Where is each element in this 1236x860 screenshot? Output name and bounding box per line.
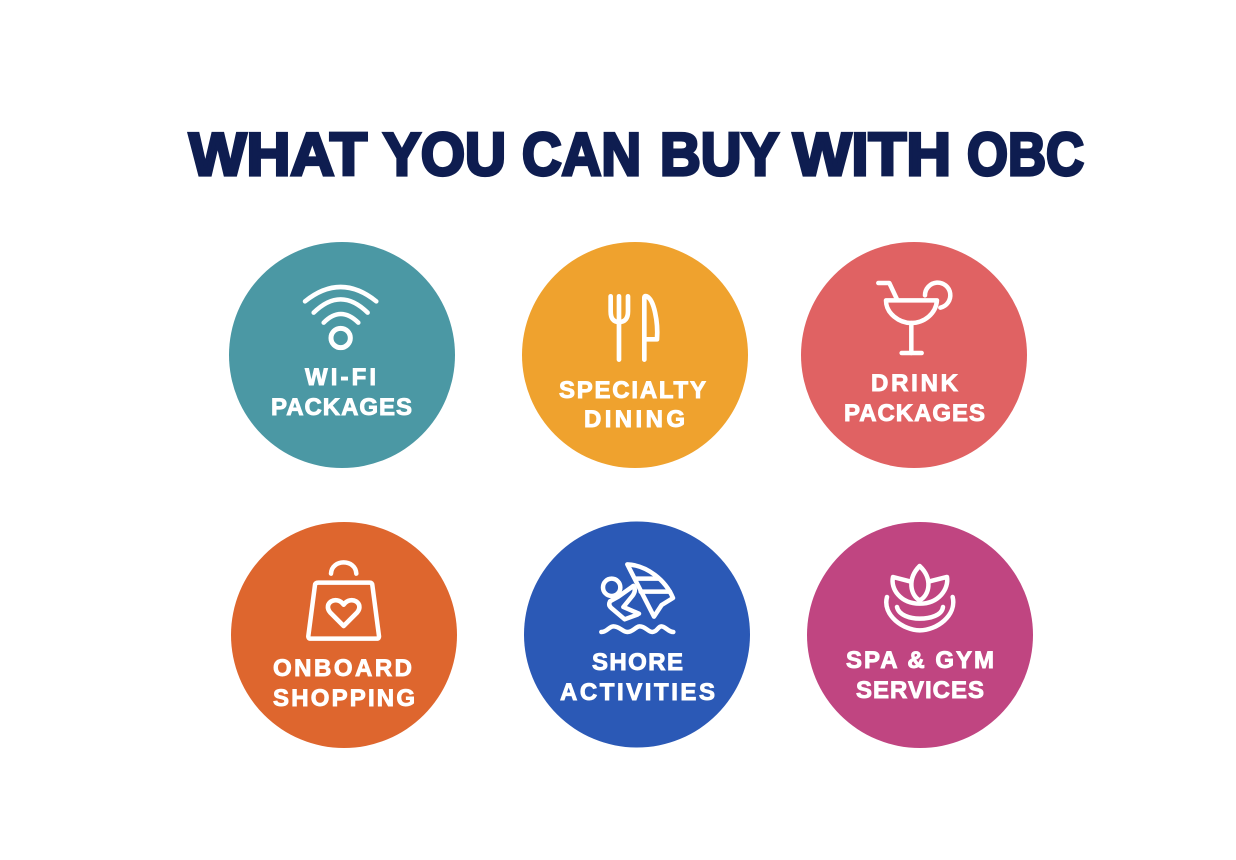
label: onboard shopping: ONBOARD [273, 655, 412, 682]
panel: specialty dining [522, 242, 748, 468]
label: drink packages [844, 370, 985, 427]
label: specialty dining: SPECIALTY [559, 377, 706, 404]
label: spa and gym services: SPA & GYM [846, 647, 994, 674]
label: spa and gym services: SERVICES [856, 677, 984, 704]
title [189, 121, 1084, 188]
label: spa and gym services [846, 647, 994, 704]
label: wi-fi packages: PACKAGES [271, 394, 412, 421]
label: shore activities: ACTIVITIES [560, 679, 715, 706]
panel: onboard shopping [231, 522, 457, 748]
panel: spa and gym services [807, 522, 1033, 748]
label: wi-fi packages [271, 364, 412, 421]
label: drink packages: DRINK [871, 370, 959, 397]
label: shore activities: SHORE [592, 649, 683, 676]
label: shore activities [560, 649, 715, 706]
label: onboard shopping [273, 655, 415, 712]
label: onboard shopping: SHOPPING [273, 685, 415, 712]
title: BUY [660, 121, 779, 188]
title: WHAT [189, 121, 367, 188]
title: OBC [967, 121, 1084, 188]
icon: kite surfer [601, 564, 673, 632]
title: CAN [522, 121, 641, 188]
icon: wi-fi [305, 287, 376, 348]
panel: wi-fi packages [229, 242, 455, 468]
title: YOU [383, 121, 506, 188]
title: WITH [793, 121, 951, 188]
panel: drink packages [801, 242, 1027, 468]
label: wi-fi packages: WI-FI [305, 364, 376, 391]
label: specialty dining: DINING [584, 406, 685, 433]
label: drink packages: PACKAGES [844, 400, 985, 427]
panel: shore activities [524, 522, 750, 748]
icon: shopping bag [308, 562, 379, 639]
icon: cocktail [878, 283, 950, 353]
label: specialty dining [559, 377, 706, 433]
icon: fork and knife [611, 296, 657, 360]
icon: lotus [886, 566, 953, 630]
